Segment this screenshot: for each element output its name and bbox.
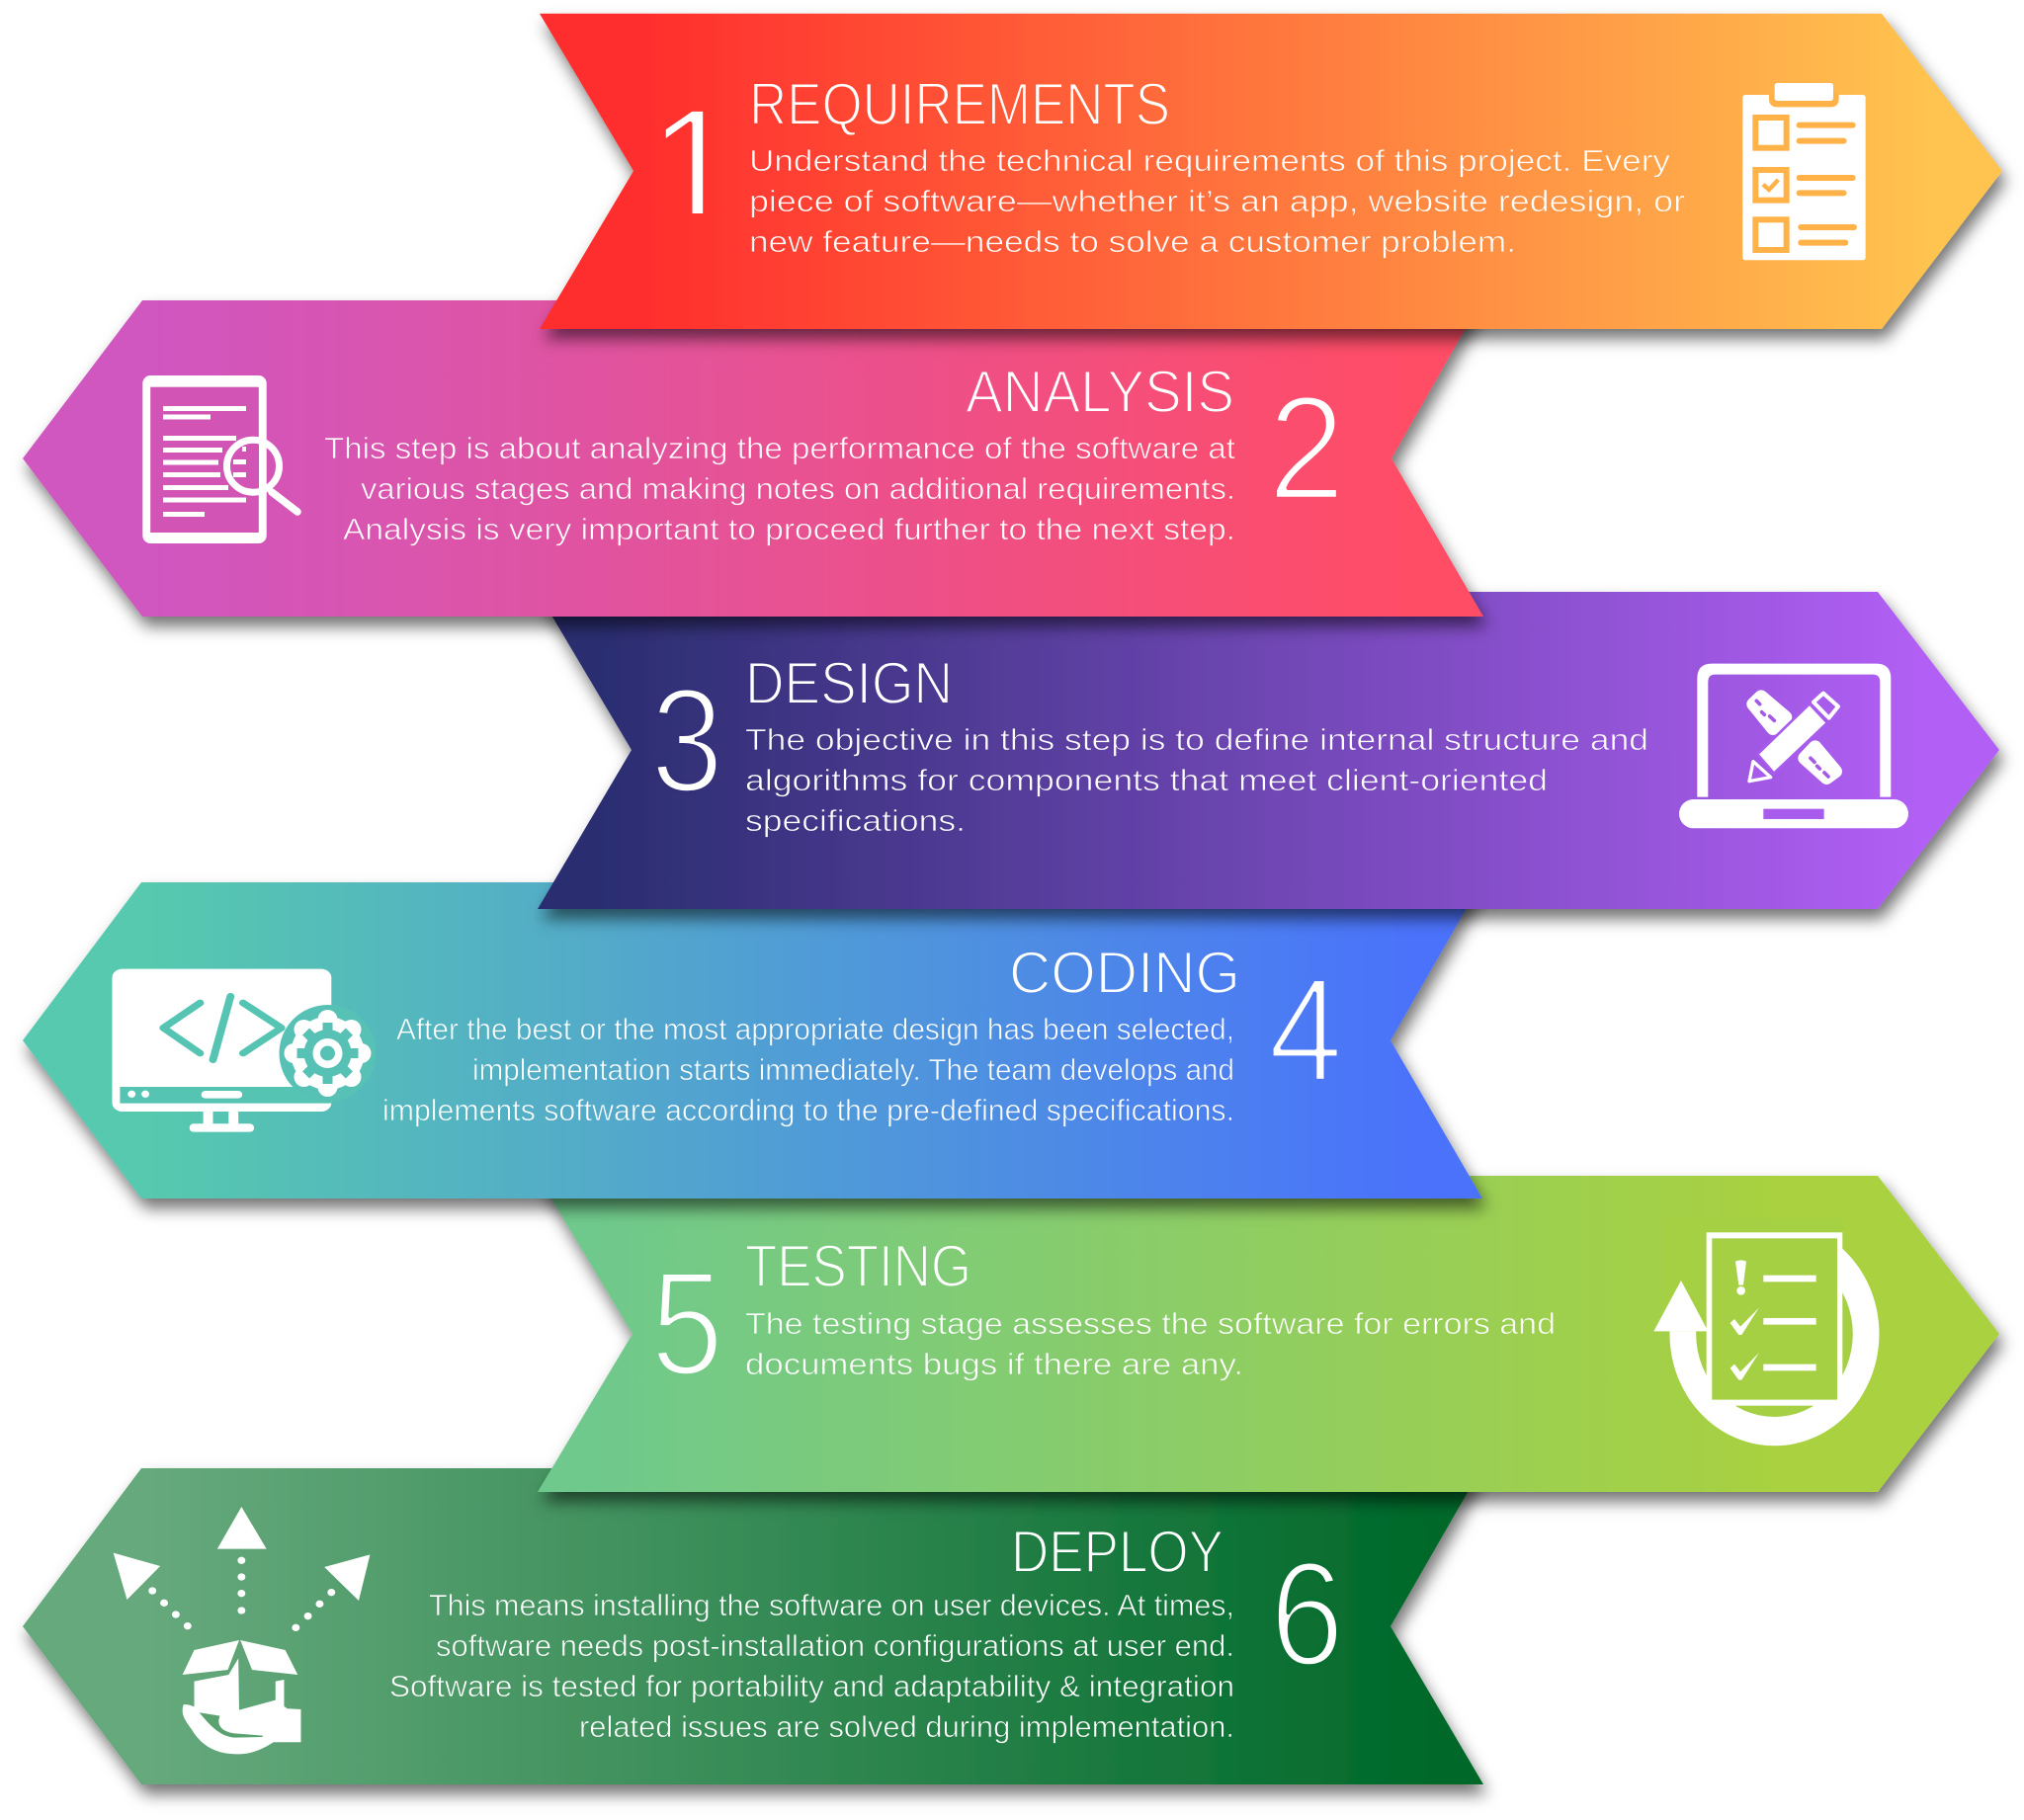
text block: design description: algorithms for components that meet client-oriented [745, 763, 1548, 797]
text block: analysis description [324, 431, 1235, 546]
text block: deploy description: This means installing the software on user devices. At times, [429, 1588, 1234, 1622]
text block: testing description [745, 1306, 1556, 1381]
icon: document with magnifier [142, 375, 297, 543]
ribbon: step 6 [23, 1468, 1483, 1784]
icon: monitor with code and gear [112, 969, 377, 1132]
text block: requirements description [749, 143, 1685, 259]
heading: ANALYSIS: ANALYSIS [966, 359, 1234, 425]
text block: requirements description: piece of software—whether it’s an app, website redesign, or [749, 184, 1685, 218]
panel: step 6 deploy [23, 1468, 1483, 1784]
number 3: 3 [650, 657, 723, 823]
text block: testing description: The testing stage assesses the software for errors and [745, 1306, 1556, 1341]
text block: coding description: implementation starts immediately. The team develops and [472, 1052, 1234, 1087]
text block: analysis description: Analysis is very important to proceed further to the next step. [343, 512, 1235, 546]
panel: step 4 coding [23, 882, 1482, 1199]
text block: testing description: documents bugs if there are any. [745, 1347, 1243, 1381]
heading: TESTING: TESTING [745, 1233, 971, 1299]
heading: CODING: CODING [1009, 940, 1240, 1006]
heading: REQUIREMENTS: REQUIREMENTS [749, 71, 1170, 137]
number 1: 1 [647, 73, 742, 263]
icon: laptop with pencil and ruler [1679, 664, 1908, 828]
ribbon: step 1 [540, 14, 2002, 329]
text block: design description [745, 722, 1648, 838]
panel: step 2 analysis [23, 300, 1483, 617]
ribbon: step 2 [23, 300, 1483, 617]
text block: coding description: After the best or the most appropriate design has been selected, [396, 1012, 1234, 1046]
text block: coding description: implements software according to the pre-defined specifications. [382, 1093, 1234, 1127]
icon: clipboard checklist [1742, 83, 1866, 260]
text block: analysis description: various stages and making notes on additional requirements. [361, 471, 1235, 506]
panel: step 3 design [538, 592, 1999, 909]
text block: deploy description: Software is tested for portability and adaptability & integration [389, 1669, 1234, 1703]
number 2: 2 [1268, 365, 1345, 531]
ribbon: step 3 [538, 592, 1999, 909]
number 4: 4 [1269, 947, 1342, 1113]
text block: deploy description: related issues are solved during implementation. [579, 1709, 1234, 1744]
number 6: 6 [1270, 1530, 1344, 1696]
ribbon: step 4 [23, 882, 1482, 1199]
text block: deploy description: software needs post-installation configurations at user end. [436, 1628, 1234, 1663]
ribbon: step 5 [538, 1176, 1999, 1492]
icon: checklist with circular arrow [1653, 1218, 1879, 1446]
text block: coding description [382, 1012, 1234, 1127]
text block: deploy description [389, 1588, 1234, 1744]
heading: DESIGN: DESIGN [745, 650, 953, 716]
text block: requirements description: Understand the technical requirements of this project. Every [749, 143, 1671, 178]
text block: requirements description: new feature—needs to solve a customer problem. [749, 224, 1516, 259]
text block: analysis description: This step is about analyzing the performance of the software at [324, 431, 1235, 465]
heading: DEPLOY: DEPLOY [1011, 1519, 1223, 1585]
text block: design description: The objective in this step is to define internal structure and [745, 722, 1648, 757]
icon: box in hand with arrows [114, 1507, 370, 1754]
panel: step 5 testing [538, 1176, 1999, 1492]
number 5: 5 [650, 1240, 723, 1406]
panel: step 1 requirements [540, 14, 2002, 329]
text block: design description: specifications. [745, 803, 966, 838]
